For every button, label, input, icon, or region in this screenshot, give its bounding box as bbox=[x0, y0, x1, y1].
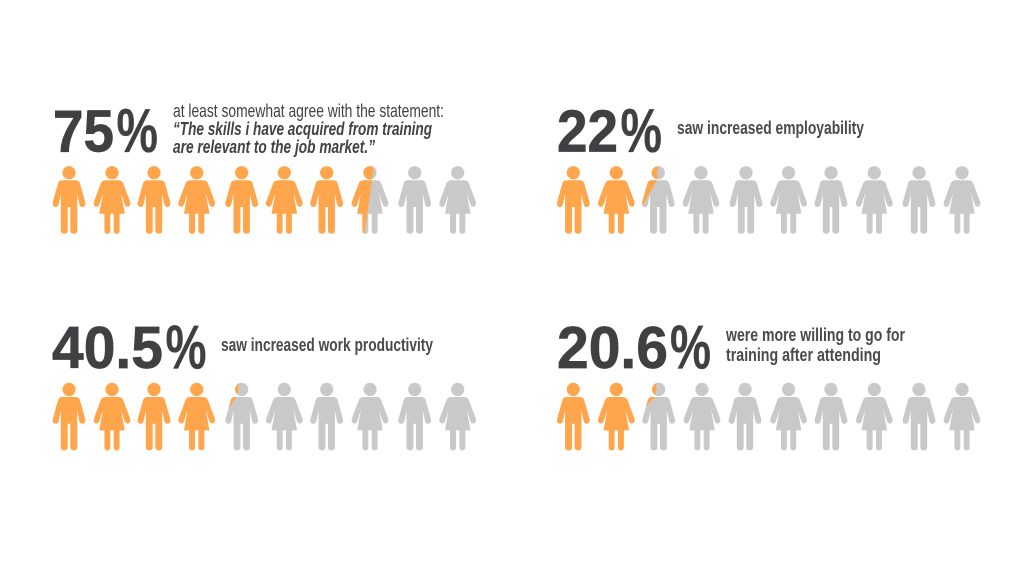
statistic: 75%: % bbox=[116, 97, 158, 166]
text: statement description: “The skills i have acquired from training bbox=[173, 119, 432, 139]
statistic: 40.5%: % bbox=[166, 314, 206, 382]
text: productivity description: saw increased work productivity bbox=[221, 335, 433, 355]
text: statement description bbox=[173, 101, 444, 157]
statistic: 20.6%: 20.6 bbox=[557, 315, 668, 381]
text: statement description: at least somewhat agree with the statement: bbox=[173, 101, 444, 121]
statistic: 40.5%: 40.5 bbox=[52, 315, 163, 381]
statistic: 22%: 22 bbox=[557, 98, 618, 164]
text: employability description: saw increased employability bbox=[677, 118, 864, 138]
panel: 20.6% more willing to go for training bbox=[557, 314, 980, 450]
text: willingness description bbox=[725, 325, 905, 365]
text: willingness description: were more willing to go for bbox=[725, 325, 905, 345]
statistic: 20.6%: % bbox=[670, 314, 711, 382]
text: statement description: are relevant to the job market.” bbox=[173, 137, 375, 157]
text: willingness description: training after attending bbox=[726, 345, 881, 365]
statistic: 75% bbox=[53, 97, 158, 166]
statistic: 22% bbox=[557, 97, 662, 166]
pictogram row: 40.5 percent bbox=[53, 383, 476, 450]
pictogram row: 20.6 percent bbox=[557, 383, 980, 450]
panel: 75% agree skills are relevant bbox=[53, 97, 476, 234]
pictogram row: 75 percent bbox=[53, 166, 476, 234]
statistic: 75%: 75 bbox=[53, 98, 114, 164]
pictogram row: 22 percent bbox=[557, 166, 980, 234]
panel: 22% saw increased employability bbox=[557, 97, 980, 234]
statistic: 22%: % bbox=[620, 97, 662, 166]
panel: 40.5% saw increased work productivity bbox=[52, 314, 476, 450]
